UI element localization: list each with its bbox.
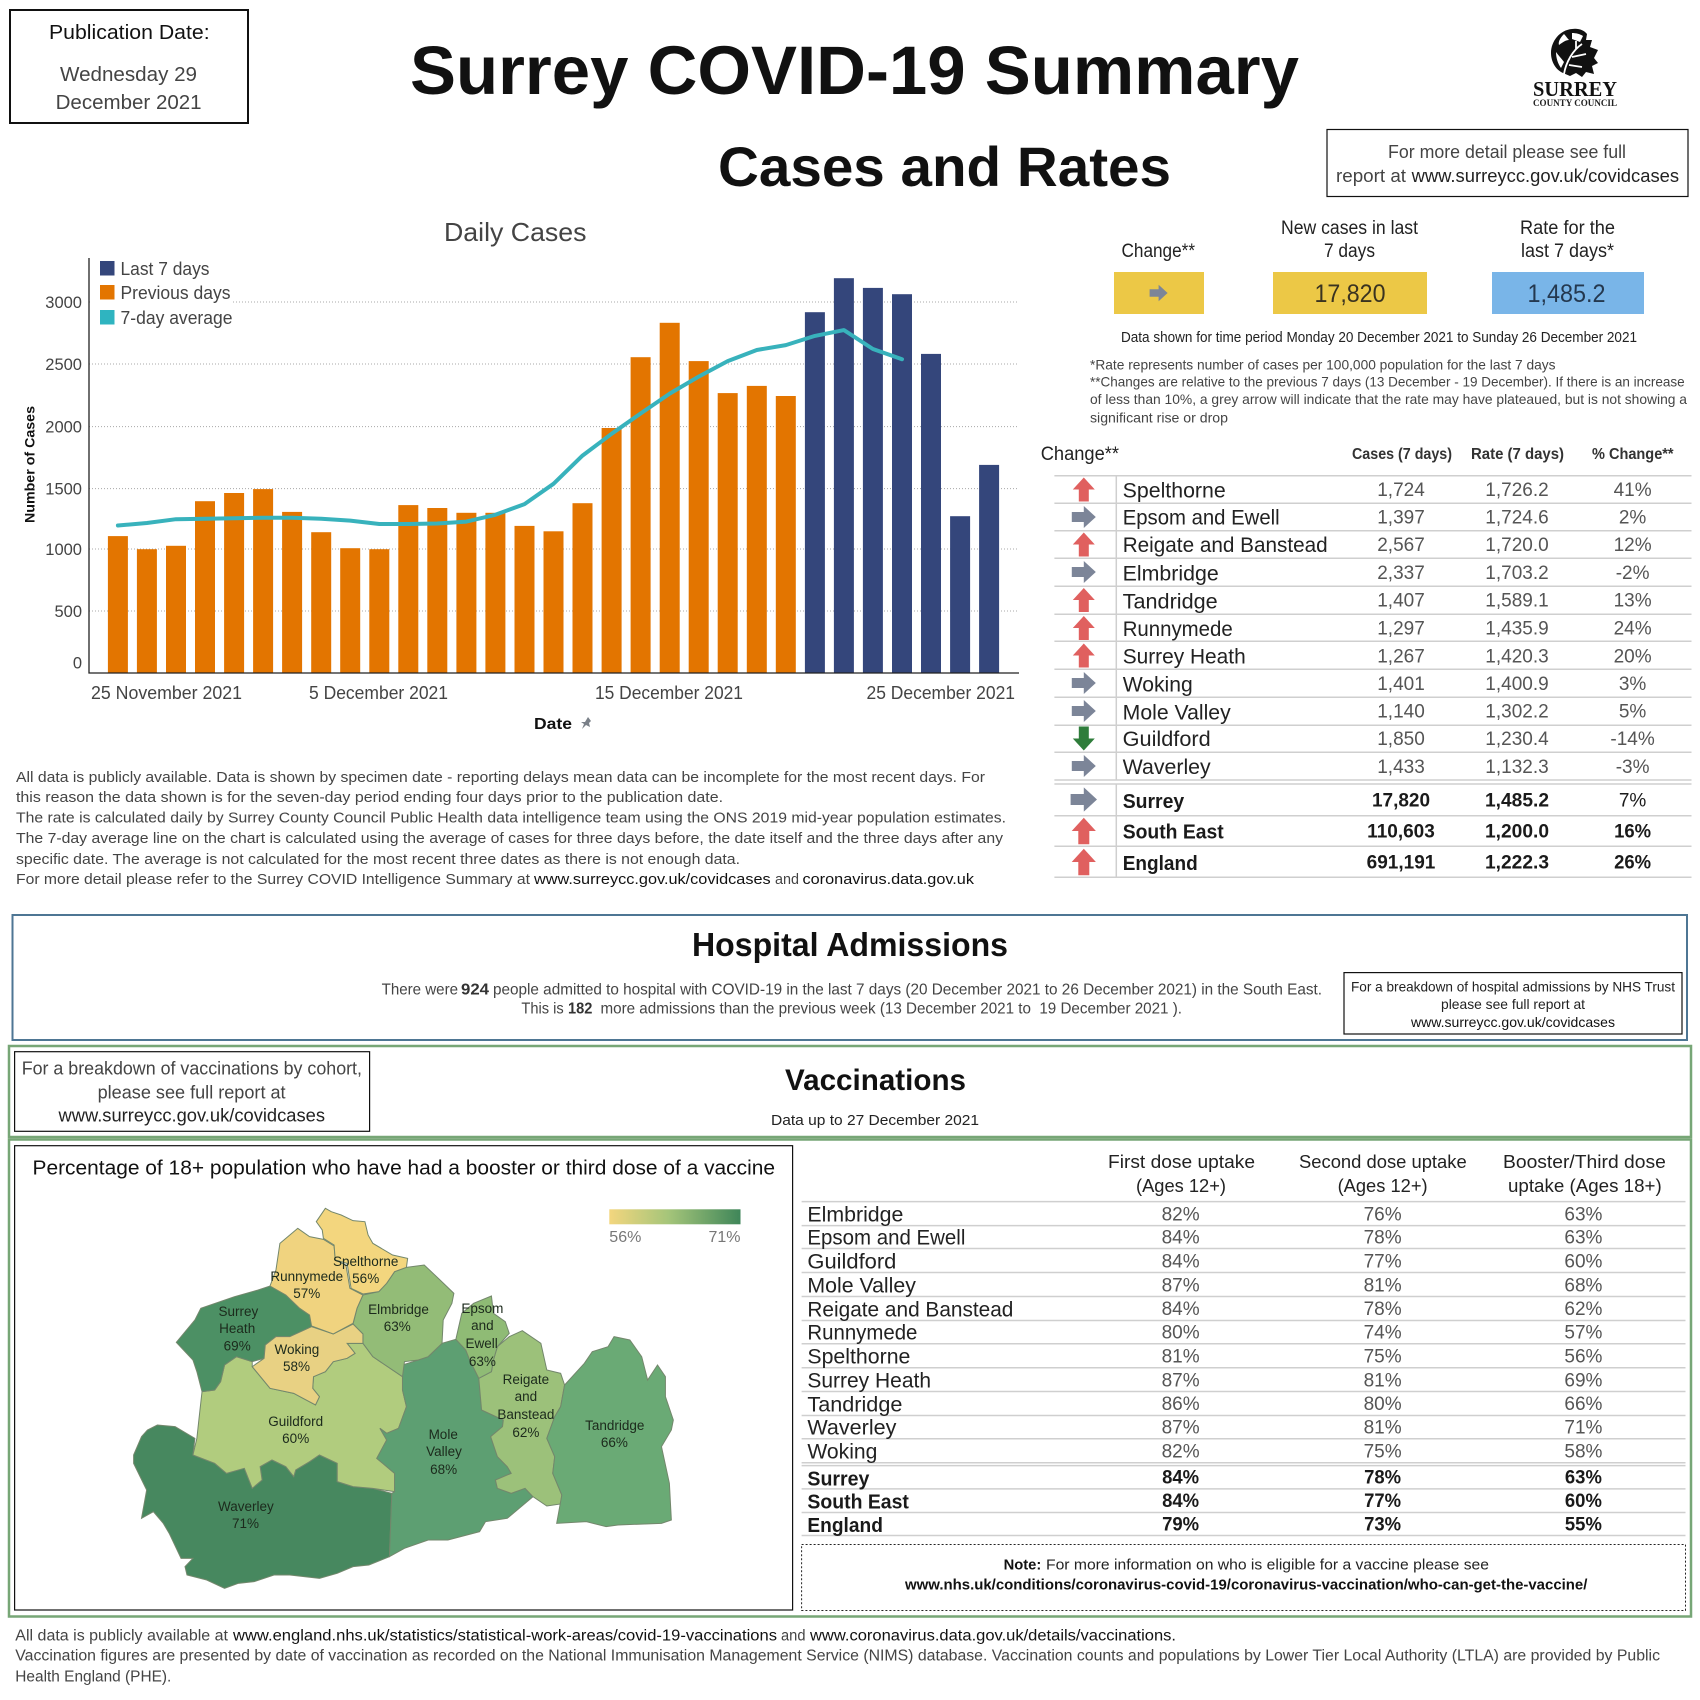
map labels: 60%	[282, 1431, 309, 1446]
row: Guildford: -14%	[1610, 729, 1655, 750]
x axis labels: 15 December 2021	[595, 683, 743, 703]
row: South East: 84%	[1162, 1491, 1199, 1512]
callout: hospital admissions link	[1344, 973, 1682, 1034]
row: South East: South East	[1123, 822, 1224, 844]
map labels: 71%	[232, 1516, 259, 1531]
row: Woking: 3%	[1619, 674, 1646, 695]
row: Runnymede: 80%	[1162, 1322, 1200, 1344]
row: Woking	[1072, 672, 1646, 696]
map labels: Surrey	[219, 1304, 259, 1319]
row: Elmbridge: Elmbridge	[807, 1204, 903, 1226]
row: Runnymede: 74%	[1364, 1322, 1402, 1344]
map labels: Runnymede	[270, 1269, 343, 1284]
row: Surrey Heath: 1,267	[1377, 646, 1425, 668]
row: Spelthorne: 41%	[1614, 480, 1652, 501]
row: Surrey Heath	[1073, 644, 1652, 668]
text block: chart notes: specific date. The average is not calculated for the most recent three dates as there is not enough data.	[16, 851, 740, 868]
table header: (Ages 12+)	[1136, 1175, 1226, 1196]
table header: First dose uptake	[1108, 1151, 1255, 1172]
KPI: rate: Rate for the	[1520, 218, 1615, 239]
row: Epsom and Ewell: 1,397	[1377, 508, 1425, 528]
publication date box	[10, 10, 248, 123]
admissions summary: This is	[521, 1000, 564, 1018]
table header: % Change**	[1592, 446, 1674, 463]
row: Mole Valley: 1,302.2	[1485, 702, 1549, 722]
row: Reigate and Banstead: 12%	[1614, 535, 1652, 556]
callout: vaccination cohort link: please see full report at	[98, 1082, 286, 1102]
row: Surrey: Surrey	[1123, 791, 1185, 813]
map labels: Waverley	[218, 1499, 274, 1514]
row: Runnymede: 1,297	[1377, 618, 1425, 640]
row: England: England	[807, 1515, 883, 1537]
row: Guildford: Guildford	[807, 1250, 896, 1274]
row: Guildford: 1,850	[1377, 729, 1425, 750]
y axis labels: 3000	[45, 294, 82, 312]
row: Elmbridge: 2,337	[1377, 563, 1425, 584]
table: vaccination uptake	[802, 1151, 1686, 1537]
row: Guildford: 60%	[1564, 1252, 1603, 1272]
row: Guildford	[807, 1250, 1603, 1274]
row: Surrey: 7%	[1619, 790, 1646, 812]
row: Tandridge: Tandridge	[807, 1394, 902, 1416]
row: South East: 16%	[1614, 822, 1651, 842]
KPI: change: Change**	[1122, 241, 1196, 262]
text block: chart notes: this reason the data shown is for the seven-day period ending four days prior to the publication date.	[16, 789, 723, 806]
map labels: Epsom	[461, 1301, 503, 1316]
row: England: England	[1123, 853, 1198, 875]
callout: vaccination cohort link: www.surreycc.gov.uk/covidcases	[57, 1106, 325, 1126]
table header	[1108, 1151, 1666, 1196]
row: Epsom and Ewell: 63%	[1564, 1228, 1603, 1248]
heading: Vaccinations	[785, 1064, 966, 1097]
table: cases by district	[1041, 444, 1692, 877]
admissions summary: people admitted to hospital with COVID-19 in the last 7 days (20 December 2021 to 26 December 2021) in the South East.	[493, 982, 1322, 998]
text block: vaccination data sources: Health England (PHE).	[15, 1668, 171, 1686]
row: Tandridge: Tandridge	[1123, 590, 1218, 614]
map legend	[609, 1209, 740, 1246]
publication date box: Publication Date:	[49, 22, 210, 44]
row: Runnymede: 1,435.9	[1485, 618, 1549, 640]
text block: chart notes	[16, 769, 1006, 888]
row: Reigate and Banstead	[1073, 532, 1652, 557]
row: Runnymede: Runnymede	[1123, 618, 1233, 641]
y axis labels: 2500	[45, 356, 82, 374]
text block: vaccination data sources: All data is publicly available at	[15, 1628, 229, 1644]
row: Mole Valley: 81%	[1364, 1276, 1402, 1296]
callout: more detail box: For more detail please see full	[1388, 142, 1626, 162]
row: Mole Valley: 68%	[1564, 1276, 1603, 1296]
line: 7-day average	[118, 330, 902, 526]
map labels: 63%	[384, 1319, 411, 1334]
map labels: Spelthorne	[333, 1254, 398, 1269]
table header: Cases (7 days)	[1352, 446, 1452, 463]
callout: more detail box	[1327, 130, 1688, 196]
y axis labels: 1000	[45, 541, 82, 559]
row: Surrey Heath: Surrey Heath	[1123, 646, 1246, 668]
text: data period: Data shown for time period Monday 20 December 2021 to Sunday 26 December 2021	[1121, 330, 1637, 346]
y axis labels: 2000	[45, 418, 82, 436]
row: Waverley: Waverley	[807, 1416, 897, 1440]
row: Runnymede: 57%	[1564, 1322, 1603, 1344]
text block: vaccination data sources: and	[781, 1628, 806, 1644]
row: South East	[807, 1491, 1602, 1514]
map labels: 63%	[469, 1354, 496, 1369]
callout: hospital admissions link: please see full report at	[1441, 996, 1585, 1012]
x axis title	[534, 716, 591, 733]
row: England: 26%	[1614, 852, 1651, 874]
publication date box: December 2021	[56, 92, 202, 114]
row: Surrey	[1071, 787, 1646, 813]
panel: hospital admissions	[12, 915, 1687, 1040]
row: Surrey	[807, 1468, 1602, 1490]
row: England: 79%	[1162, 1514, 1199, 1536]
map labels: 62%	[512, 1425, 539, 1440]
row: Waverley: 1,433	[1377, 757, 1425, 778]
row: Spelthorne	[807, 1346, 1603, 1368]
text block: chart notes: and	[775, 871, 799, 888]
row: Guildford: 77%	[1364, 1252, 1402, 1272]
row: Woking: 75%	[1364, 1442, 1402, 1462]
map labels: 69%	[224, 1338, 251, 1354]
row: Woking: 1,401	[1377, 674, 1425, 695]
KPI: rate	[1492, 218, 1644, 314]
row: England	[1072, 849, 1651, 875]
row: Tandridge: 1,589.1	[1485, 590, 1549, 612]
map labels: and	[515, 1389, 537, 1404]
text block: rate and change notes: *Rate represents number of cases per 100,000 population for the last 7 days	[1090, 356, 1556, 372]
row: Elmbridge: Elmbridge	[1123, 562, 1219, 586]
row: Elmbridge: 63%	[1564, 1204, 1603, 1226]
text block: chart notes: The rate is calculated daily by Surrey County Council Public Health data intelligence team using the ONS 2019 mid-year population estimates.	[16, 810, 1006, 826]
row: Epsom and Ewell: Epsom and Ewell	[1123, 506, 1280, 530]
text block: vaccination data sources	[15, 1628, 1660, 1686]
table header: Booster/Third dose	[1503, 1151, 1666, 1172]
chart title: Daily Cases	[444, 217, 586, 247]
chart legend	[100, 259, 232, 328]
row: Mole Valley: 5%	[1619, 702, 1646, 722]
row: Spelthorne: 1,724	[1377, 480, 1425, 501]
row: Guildford: Guildford	[1123, 728, 1211, 751]
text block: chart notes: coronavirus.data.gov.uk	[802, 871, 975, 888]
map labels: 68%	[430, 1462, 457, 1477]
row: Tandridge: 13%	[1614, 590, 1652, 612]
row: Epsom and Ewell	[807, 1226, 1603, 1250]
callout: vaccination cohort link: For a breakdown of vaccinations by cohort,	[22, 1058, 362, 1078]
admissions summary: There were	[382, 982, 458, 998]
choropleth map	[134, 1208, 673, 1588]
row: Surrey: 17,820	[1372, 790, 1430, 812]
chart legend: Previous days	[120, 283, 230, 303]
y axis labels: 500	[54, 603, 82, 621]
row: Mole Valley: 1,140	[1377, 702, 1425, 722]
row: England: 1,222.3	[1485, 852, 1549, 874]
KPI: rate: 1,485.2	[1528, 280, 1606, 308]
text block: rate and change notes: of less than 10%, a grey arrow will indicate that the rate may have plateaued, but is not showing a	[1090, 391, 1687, 407]
map labels: Woking	[275, 1342, 319, 1357]
KPI: change	[1114, 241, 1204, 314]
callout: more detail box: www.surreycc.gov.uk/covidcases	[1411, 166, 1679, 186]
row: Elmbridge: 1,703.2	[1485, 563, 1549, 584]
map legend: 71%	[708, 1229, 740, 1246]
row: Woking: Woking	[807, 1440, 877, 1464]
map labels: 58%	[283, 1359, 310, 1374]
row: England: 55%	[1565, 1514, 1602, 1536]
row: Mole Valley: Mole Valley	[1123, 702, 1231, 724]
row: Waverley: 71%	[1564, 1418, 1603, 1438]
row: Surrey: Surrey	[807, 1468, 870, 1490]
row: Waverley: Waverley	[1123, 756, 1211, 779]
KPI: new cases: 7 days	[1324, 241, 1375, 262]
row: Guildford: 1,230.4	[1485, 729, 1549, 750]
row: Reigate and Banstead: 84%	[1162, 1299, 1200, 1320]
admissions summary: 924	[461, 982, 489, 998]
map labels: Banstead	[497, 1407, 554, 1422]
y axis title: Number of Cases	[22, 406, 38, 523]
text block: chart notes: www.surreycc.gov.uk/covidcases	[533, 871, 771, 888]
row: England: 691,191	[1367, 852, 1436, 874]
row: Surrey Heath: 20%	[1614, 646, 1652, 668]
map labels: 57%	[293, 1286, 320, 1301]
note: vaccine eligibility	[802, 1544, 1686, 1610]
panel: vaccinations header	[9, 1046, 1691, 1137]
row: South East: 60%	[1565, 1491, 1602, 1512]
row: England: 73%	[1364, 1514, 1401, 1536]
table header: Rate (7 days)	[1471, 446, 1564, 463]
row: Reigate and Banstead	[807, 1298, 1603, 1322]
axes	[89, 258, 1019, 673]
map labels	[218, 1254, 644, 1531]
row: Runnymede: Runnymede	[807, 1322, 917, 1344]
row: Reigate and Banstead: 78%	[1364, 1299, 1402, 1320]
row: Elmbridge	[807, 1204, 1603, 1226]
map labels: 66%	[601, 1435, 628, 1450]
row: Surrey Heath: 81%	[1364, 1370, 1402, 1392]
data date: Data up to 27 December 2021	[771, 1112, 979, 1129]
row: Runnymede: 24%	[1614, 618, 1652, 640]
row: Mole Valley	[1072, 700, 1646, 724]
row: Epsom and Ewell	[1072, 506, 1646, 530]
map labels: Mole	[429, 1427, 458, 1442]
bars: last 7 days	[805, 278, 999, 673]
row: Spelthorne: 81%	[1162, 1346, 1200, 1368]
row: Reigate and Banstead: Reigate and Banstead	[807, 1298, 1013, 1322]
row: Elmbridge	[1072, 561, 1650, 586]
title: Surrey COVID-19 Summary	[410, 32, 1299, 109]
row: Woking	[807, 1440, 1603, 1464]
row: Tandridge: 80%	[1364, 1394, 1402, 1415]
row: Waverley: 81%	[1364, 1418, 1402, 1438]
row: Surrey: 63%	[1565, 1468, 1602, 1488]
callout: vaccination cohort link	[15, 1052, 370, 1131]
row: Tandridge	[1073, 588, 1652, 614]
x axis labels: 25 December 2021	[866, 683, 1015, 703]
row: Waverley	[807, 1416, 1603, 1440]
row: Tandridge: 66%	[1564, 1394, 1603, 1415]
text block: rate and change notes: significant rise or drop	[1090, 410, 1228, 426]
admissions summary	[382, 982, 1322, 1018]
row: Surrey Heath: 1,420.3	[1485, 646, 1549, 668]
row: Spelthorne: 56%	[1564, 1346, 1603, 1368]
row: Guildford: 84%	[1162, 1252, 1200, 1272]
row: Woking: 82%	[1162, 1442, 1200, 1462]
row: South East: 110,603	[1367, 822, 1435, 842]
text block: chart notes: For more detail please refer to the Surrey COVID Intelligence Summary at	[16, 871, 531, 888]
text block: chart notes: The 7-day average line on the chart is calculated using the average of cases for three days before, the date itself and the three days after any	[16, 830, 1004, 847]
map labels: Heath	[219, 1321, 255, 1336]
row: Spelthorne: 1,726.2	[1485, 480, 1549, 501]
chart legend: Last 7 days	[120, 259, 210, 279]
admissions summary: 182	[568, 1000, 592, 1018]
row: Epsom and Ewell: 84%	[1162, 1228, 1200, 1248]
row: Woking: 1,400.9	[1485, 674, 1549, 695]
row: Reigate and Banstead: 2,567	[1377, 535, 1425, 556]
text block: vaccination data sources: www.england.nhs.uk/statistics/statistical-work-areas/covid-19-vaccinations	[232, 1628, 777, 1644]
table header	[1041, 444, 1674, 465]
row: Epsom and Ewell: 78%	[1364, 1228, 1402, 1248]
table header: Change**	[1041, 444, 1120, 465]
panel: vaccination details	[9, 1140, 1691, 1616]
table header: Second dose uptake	[1299, 1151, 1467, 1172]
row: Surrey Heath	[807, 1370, 1603, 1392]
map labels: Valley	[426, 1444, 462, 1459]
row: Spelthorne: 75%	[1364, 1346, 1402, 1368]
row: England	[807, 1514, 1602, 1537]
row: Elmbridge: 76%	[1364, 1204, 1402, 1226]
row: South East: South East	[807, 1492, 909, 1514]
x axis labels: 5 December 2021	[309, 683, 448, 703]
map legend: 56%	[609, 1229, 641, 1246]
map title: Percentage of 18+ population who have had a booster or third dose of a vaccine	[32, 1156, 775, 1180]
row: Mole Valley	[807, 1274, 1603, 1298]
row: Tandridge	[807, 1394, 1603, 1416]
bars: previous days	[108, 323, 796, 673]
row: Epsom and Ewell: 1,724.6	[1485, 508, 1549, 528]
KPI: new cases: New cases in last	[1281, 218, 1419, 239]
row: Waverley: 1,132.3	[1485, 757, 1549, 778]
row: Spelthorne: Spelthorne	[807, 1346, 910, 1368]
row: Epsom and Ewell: 2%	[1619, 508, 1646, 528]
note: vaccine eligibility: For more information on who is eligible for a vaccine please see	[1046, 1556, 1489, 1574]
row: Woking: 58%	[1564, 1442, 1603, 1462]
table header: (Ages 12+)	[1338, 1175, 1428, 1196]
x axis labels	[91, 683, 1015, 703]
note: vaccine eligibility: www.nhs.uk/conditions/coronavirus-covid-19/coronavirus-vaccination/who-can-get-the-vaccine/	[904, 1576, 1588, 1594]
row: Reigate and Banstead: Reigate and Banstead	[1123, 534, 1328, 557]
callout: more detail box: report at	[1336, 166, 1406, 186]
panel: booster map	[15, 1146, 793, 1610]
note: vaccine eligibility: Note:	[1004, 1556, 1041, 1574]
table header: uptake (Ages 18+)	[1508, 1175, 1662, 1196]
row: South East: 1,200.0	[1485, 822, 1549, 842]
row: Surrey: 84%	[1162, 1468, 1199, 1488]
KPI: new cases	[1273, 218, 1427, 314]
map labels: Elmbridge	[368, 1302, 429, 1317]
callout: hospital admissions link: For a breakdown of hospital admissions by NHS Trust	[1351, 978, 1675, 994]
map labels: Ewell	[465, 1336, 498, 1351]
callout: hospital admissions link: www.surreycc.gov.uk/covidcases	[1410, 1014, 1615, 1030]
row: Surrey Heath: Surrey Heath	[807, 1370, 931, 1392]
logo: Surrey County Council: COUNTY COUNCIL	[1533, 98, 1617, 108]
map labels: and	[471, 1318, 494, 1333]
heading: cases and rates: Cases and Rates	[718, 135, 1171, 198]
row: Elmbridge: -2%	[1616, 563, 1650, 584]
admissions summary: more admissions than the previous week (13 December 2021 to 19 December 2021 ).	[600, 1000, 1182, 1018]
KPI: new cases: 17,820	[1314, 280, 1386, 308]
row: Surrey Heath: 69%	[1564, 1370, 1603, 1392]
x axis title: Date	[534, 716, 572, 733]
row: Elmbridge: 82%	[1162, 1204, 1200, 1226]
row: Waverley	[1072, 755, 1650, 779]
y axis labels: 1500	[45, 480, 82, 498]
chart legend: 7-day average	[120, 308, 232, 328]
map labels: 56%	[352, 1271, 379, 1286]
map labels: Reigate	[503, 1372, 549, 1387]
row: Reigate and Banstead: 62%	[1564, 1299, 1603, 1320]
row: Guildford	[1073, 726, 1655, 751]
row: Reigate and Banstead: 1,720.0	[1485, 535, 1549, 556]
map labels: Tandridge	[585, 1418, 644, 1433]
y axis labels	[45, 294, 82, 672]
text block: vaccination data sources: www.coronavirus.data.gov.uk/details/vaccinations.	[809, 1628, 1176, 1644]
panel: headline numbers	[1114, 218, 1644, 314]
logo: Surrey County Council	[1533, 29, 1617, 108]
x axis labels: 25 November 2021	[91, 683, 242, 703]
text block: vaccination data sources: Vaccination figures are presented by date of vaccination as recorded on the National Immunisation Management Service (NIMS) database. Vaccination counts and populations by Lower Tier Local Authority (LTLA) are provided by Public	[15, 1648, 1660, 1664]
row: Woking: Woking	[1123, 674, 1193, 696]
text block: rate and change notes: **Changes are relative to the previous 7 days (13 December - 19 December). If there is an increase	[1090, 374, 1685, 390]
text block: chart notes: All data is publicly available. Data is shown by specimen date - reporting delays mean data can be incomplete for the most recent days. For	[16, 769, 985, 786]
row: Tandridge: 86%	[1162, 1394, 1200, 1415]
heading: Hospital Admissions	[692, 926, 1008, 963]
KPI: rate: last 7 days*	[1521, 241, 1615, 262]
row: Surrey: 1,485.2	[1485, 790, 1549, 812]
row: Spelthorne: Spelthorne	[1123, 480, 1226, 502]
publication date box: Wednesday 29	[60, 64, 197, 86]
row: Mole Valley: Mole Valley	[807, 1274, 916, 1298]
map labels: Guildford	[268, 1414, 323, 1429]
y axis labels: 0	[73, 654, 82, 672]
row: Tandridge: 1,407	[1377, 590, 1425, 612]
row: Runnymede	[807, 1322, 1603, 1344]
row: South East: 77%	[1364, 1491, 1401, 1512]
logo: Surrey County Council: SURREY	[1533, 77, 1617, 101]
row: Waverley: 87%	[1162, 1418, 1200, 1438]
row: South East	[1072, 818, 1651, 844]
row: Mole Valley: 87%	[1162, 1276, 1200, 1296]
bar chart: daily cases	[22, 258, 1019, 733]
text block: rate and change notes	[1090, 356, 1687, 426]
row: Runnymede	[1073, 616, 1652, 641]
row: Waverley: -3%	[1616, 757, 1650, 778]
row: Surrey Heath: 87%	[1162, 1370, 1200, 1392]
row: Spelthorne	[1073, 478, 1652, 502]
row: Epsom and Ewell: Epsom and Ewell	[807, 1226, 965, 1250]
row: Surrey: 78%	[1364, 1468, 1401, 1488]
